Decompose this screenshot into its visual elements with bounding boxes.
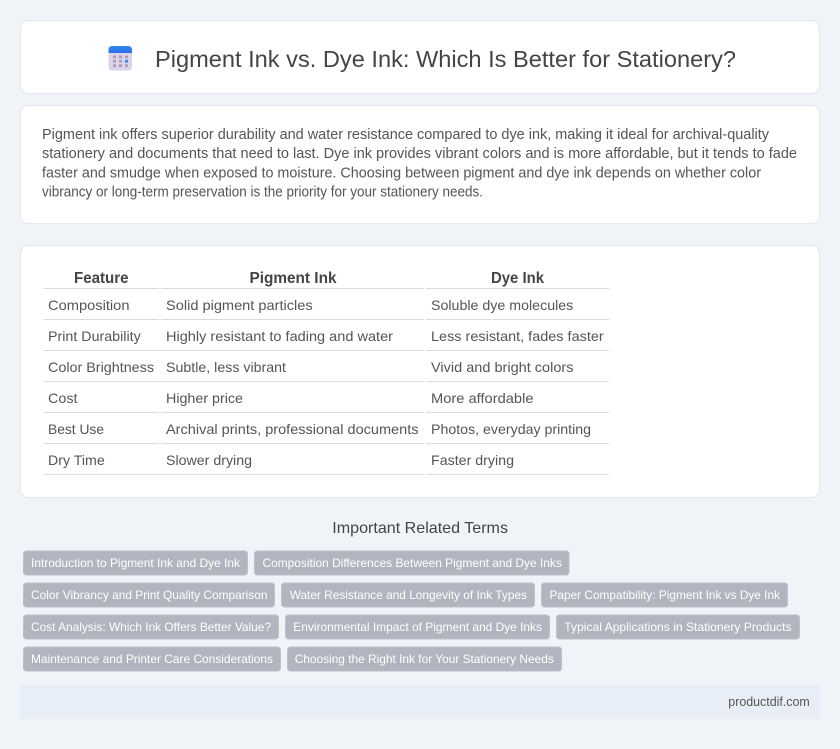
tag: Paper Compatibility: Pigment Ink vs Dye Ink: [550, 588, 781, 602]
table header row: Pigment Ink: [250, 270, 337, 287]
table row: color brightness: Vivid and bright colors: [431, 359, 574, 375]
table row: best use: Photos, everyday printing: [431, 421, 591, 437]
table row: print durability: Highly resistant to fading and water: [166, 328, 393, 344]
table row: dry time: Dry Time: [48, 452, 105, 468]
table row: composition: Composition: [48, 297, 130, 313]
tag: Color Vibrancy and Print Quality Comparison: [31, 588, 268, 602]
footer source text: productdif.com: [728, 695, 810, 709]
table header row: Feature: [74, 270, 129, 287]
table row: color brightness: Color Brightness: [48, 359, 154, 375]
table row: composition: [48, 297, 573, 313]
tag: [286, 615, 550, 639]
tag: Typical Applications in Stationery Products: [564, 620, 792, 634]
text block: summary: [42, 127, 797, 200]
tag: [254, 551, 569, 575]
table row: print durability: Less resistant, fades faster: [431, 328, 604, 344]
table row: cost: More affordable: [431, 390, 534, 406]
table row: dry time: Faster drying: [431, 452, 514, 468]
text block: summary: Pigment ink offers superior durability and water resistance compared to dye ink, making it ideal for archival-quality: [42, 127, 770, 143]
table header row: [74, 270, 544, 287]
table row: best use: [48, 421, 591, 437]
tag: Water Resistance and Longevity of Ink Types: [290, 588, 527, 602]
text block: summary: vibrancy or long-term preservation is the priority for your stationery needs.: [42, 184, 483, 200]
table row: print durability: [48, 328, 604, 344]
tag: Maintenance and Printer Care Considerations: [31, 652, 273, 666]
title: Pigment Ink vs. Dye Ink: Which Is Better for Stationery?: [155, 46, 736, 72]
footer bar: [20, 685, 820, 719]
tag: [556, 615, 800, 639]
heading: important related terms: Important Related Terms: [332, 520, 508, 537]
tag: [24, 551, 248, 575]
table row: best use: Archival prints, professional documents: [166, 421, 418, 437]
text block: summary: stationery and documents that need to last. Dye ink provides vibrant colors and is more affordable, but it tends to fade: [42, 146, 797, 162]
tag: Choosing the Right Ink for Your Stationery Needs: [295, 652, 554, 666]
text block: summary: faster and smudge when exposed to moisture. Choosing between pigment and dye ink depends on whether color: [42, 166, 761, 182]
tag: Environmental Impact of Pigment and Dye Inks: [293, 620, 542, 634]
table row: color brightness: [48, 359, 574, 375]
tag: [282, 583, 534, 607]
tag: [542, 583, 788, 607]
icon: calendar: [108, 46, 132, 70]
panel: comparison table: [20, 246, 820, 498]
table header row: Dye Ink: [491, 270, 544, 287]
table row: cost: Higher price: [166, 390, 243, 406]
tag: [288, 647, 562, 671]
tag: [24, 583, 274, 607]
tag: Introduction to Pigment Ink and Dye Ink: [31, 556, 241, 570]
table row: cost: [48, 390, 534, 406]
table row: dry time: [48, 452, 514, 468]
table row: color brightness: Subtle, less vibrant: [166, 359, 286, 375]
tag: Cost Analysis: Which Ink Offers Better Value?: [31, 620, 271, 634]
table row: dry time: Slower drying: [166, 452, 252, 468]
table row: cost: Cost: [48, 390, 78, 406]
table row: print durability: Print Durability: [48, 328, 141, 344]
tag: [24, 615, 278, 639]
tag: [24, 647, 280, 671]
tag: Composition Differences Between Pigment and Dye Inks: [262, 556, 562, 570]
table row: composition: Solid pigment particles: [166, 297, 313, 313]
table row: composition: Soluble dye molecules: [431, 297, 573, 313]
panel: related term tags: [24, 551, 800, 671]
panel: introduction paragraph: [20, 106, 820, 224]
table row: best use: Best Use: [48, 421, 104, 437]
panel: title header: [20, 20, 820, 94]
